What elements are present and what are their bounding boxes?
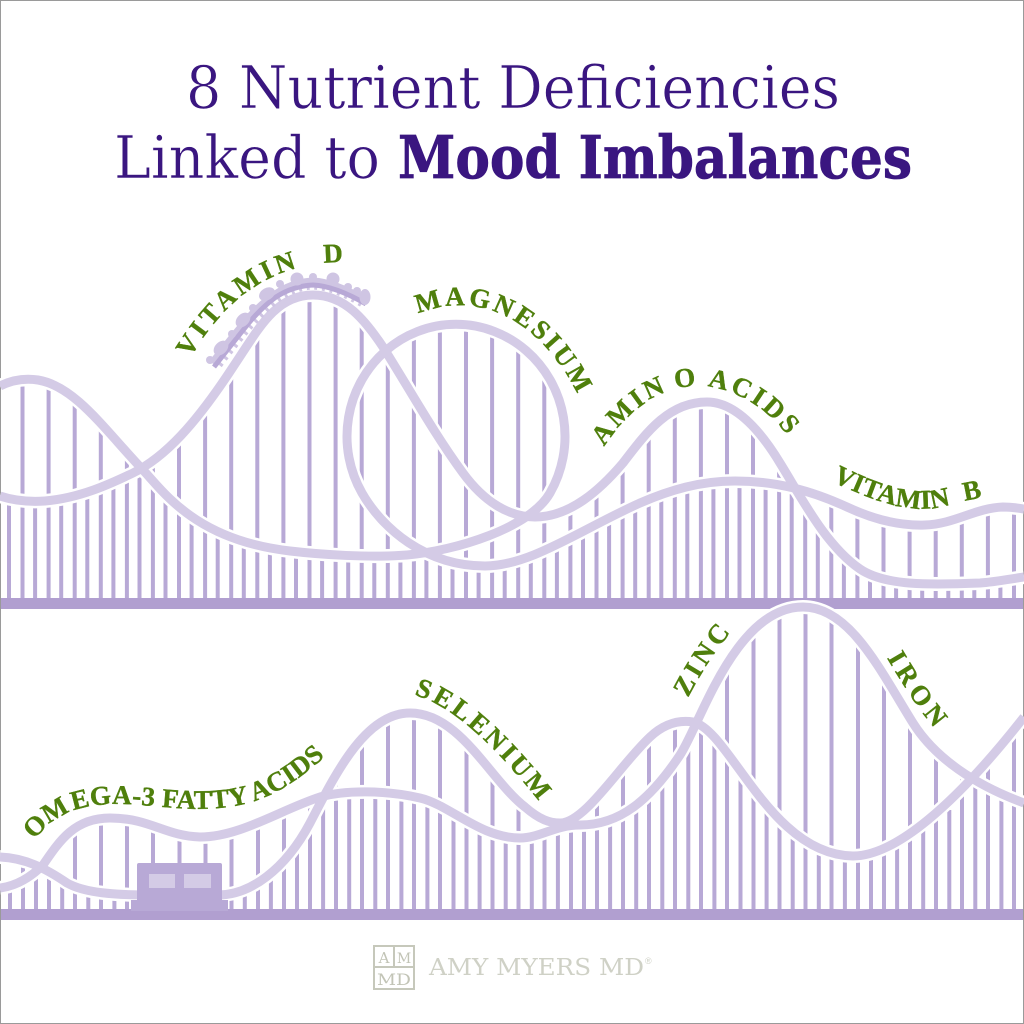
label: Omega-3 Fatty Acids: OMEGA-3 FATTY ACIDS bbox=[24, 744, 322, 836]
label: Magnesium: MAGNESIUM bbox=[413, 287, 593, 394]
label: Amino Acids: AMINO ACIDS bbox=[594, 368, 800, 447]
registered mark: ® bbox=[645, 956, 652, 966]
logo: Amy Myers MD bbox=[374, 946, 652, 989]
title bbox=[114, 53, 912, 192]
logo monogram box: MD bbox=[377, 971, 411, 989]
top roller coaster bbox=[0, 272, 1024, 609]
coaster train car bbox=[131, 863, 228, 911]
logo wordmark: AMY MYERS MD bbox=[428, 955, 644, 981]
title: Linked to bbox=[114, 123, 380, 192]
title: 8 Nutrient Deficiencies bbox=[186, 53, 840, 122]
bottom row support posts bbox=[10, 607, 1014, 912]
bottom row track halo bbox=[0, 607, 1024, 895]
logo monogram box: A bbox=[378, 949, 390, 967]
logo monogram box: M bbox=[397, 951, 411, 967]
title: Mood Imbalances bbox=[398, 123, 912, 192]
top row base rail bbox=[1, 598, 1023, 609]
label: Iron: IRON bbox=[887, 649, 948, 727]
bottom row tracks bbox=[0, 607, 1024, 895]
logo monogram box bbox=[374, 946, 414, 989]
label: Vitamin B: VITAMIN B bbox=[839, 465, 981, 510]
top row track halo bbox=[0, 295, 1024, 584]
label: Zinc: ZINC bbox=[673, 623, 729, 697]
coaster cars with riders bbox=[206, 272, 370, 367]
label: Selenium: SELENIUM bbox=[415, 680, 552, 801]
label: Vitamin D: VITAMIN D bbox=[174, 244, 342, 351]
bottom row base rail bbox=[1, 909, 1023, 920]
top row support posts bbox=[9, 295, 1014, 600]
top row tracks bbox=[0, 295, 1024, 584]
bottom roller coaster bbox=[0, 607, 1024, 920]
